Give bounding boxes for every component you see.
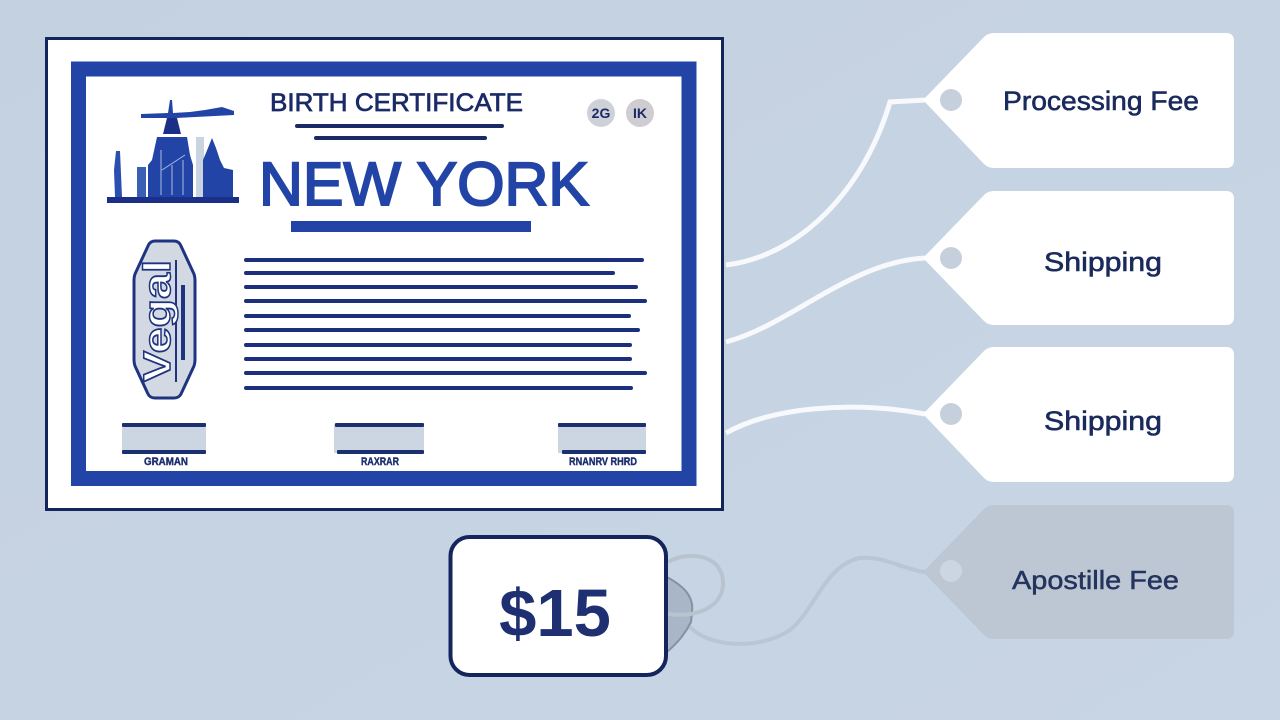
badge: round stamps: 2G — [592, 105, 610, 121]
heading rule lower — [314, 136, 487, 140]
heading: New York: NEW YORK — [259, 150, 589, 218]
callout: price $15: $15 — [499, 576, 611, 651]
tag: apostille fee — [923, 505, 1234, 639]
signature block: centre — [334, 423, 424, 468]
connector: price tag loop — [668, 556, 723, 615]
heading: birth certificate: BIRTH CERTIFICATE — [270, 89, 523, 117]
connector: certificate to second shipping — [726, 407, 925, 433]
tag: shipping: Shipping — [1044, 247, 1162, 277]
seal: vertical emblem — [134, 241, 195, 398]
badge: round stamps — [587, 99, 654, 127]
tag: processing fee — [923, 33, 1234, 168]
connector: certificate to processing fee — [726, 100, 925, 265]
connector: price tag string to apostille fee — [690, 558, 925, 644]
heading rule upper — [295, 124, 504, 128]
signature block: left: GRAMAN — [144, 456, 188, 468]
panel: birth certificate — [46, 38, 722, 510]
callout: price $15 — [450, 537, 666, 675]
connector: certificate to first shipping — [726, 258, 925, 342]
badge: round stamps: IK — [633, 105, 647, 121]
signature block: left — [122, 423, 206, 468]
tag: shipping — [923, 191, 1234, 325]
icon: New York skyline — [107, 100, 239, 203]
signature block: right — [558, 423, 646, 468]
icon: price tag knot — [667, 577, 692, 652]
tag: shipping second: Shipping — [1044, 406, 1162, 436]
text block: certificate body lines — [244, 258, 647, 390]
tag: processing fee: Processing Fee — [1003, 86, 1199, 116]
tag: apostille fee: Apostille Fee — [1012, 565, 1179, 595]
tag: shipping second — [923, 347, 1234, 482]
certificate sheet — [46, 38, 722, 510]
blue certificate frame — [78, 69, 689, 478]
seal: vertical emblem: Vegal — [137, 260, 179, 382]
signature block: centre: RAXRAR — [361, 456, 399, 468]
signature block: right: RNANRV RHRD — [569, 456, 637, 468]
New York underline — [291, 221, 531, 232]
